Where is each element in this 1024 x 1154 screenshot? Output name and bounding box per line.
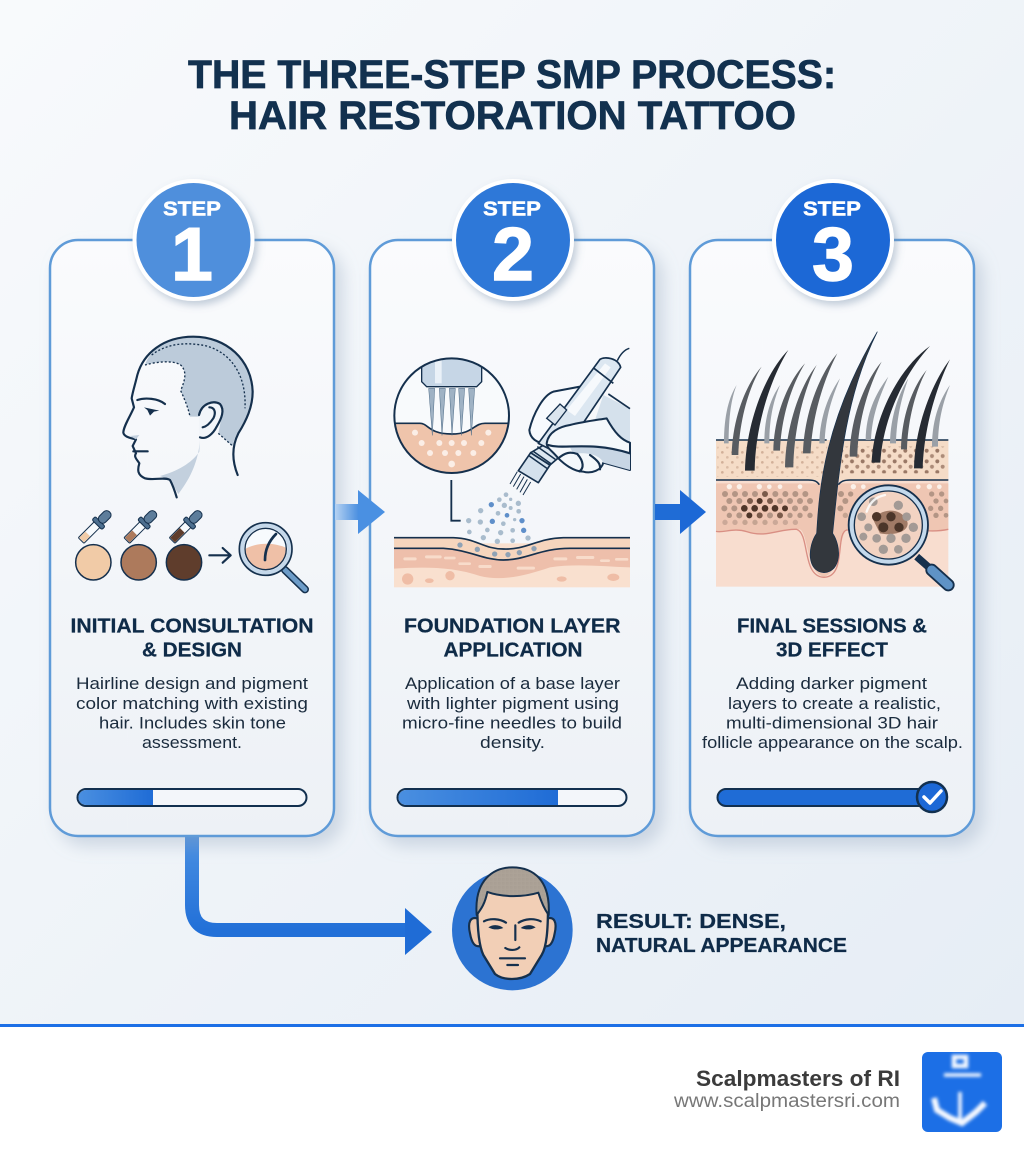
fine hairs xyxy=(724,377,950,447)
pen nose xyxy=(518,453,550,483)
step 1 description: Hairline design and pigment xyxy=(76,675,308,693)
card 1 outline xyxy=(50,240,334,836)
arrow: step 2 to step 3 xyxy=(655,490,706,534)
result: portrait xyxy=(452,867,573,997)
step 2 description: micro-fine needles to build xyxy=(402,714,622,732)
step 3 description xyxy=(702,675,963,752)
step 3 description: Adding darker pigment xyxy=(736,675,927,693)
step 3 heading: FINAL SESSIONS & xyxy=(737,616,927,638)
back of hand xyxy=(529,387,583,443)
step 2 badge xyxy=(454,181,572,299)
step 2 progress bar xyxy=(398,789,626,806)
swatch medium xyxy=(121,545,156,580)
swatch dark xyxy=(166,545,202,580)
step 1 description: color matching with existing xyxy=(76,695,308,713)
step 1 description xyxy=(76,675,308,752)
step 3 progress bar with check xyxy=(718,782,947,812)
step 1 heading: INITIAL CONSULTATION xyxy=(70,616,314,638)
dark hairs xyxy=(745,346,950,471)
icon: pigment spray xyxy=(466,492,531,544)
icon: SMP pen and hand xyxy=(510,348,630,495)
result: label: RESULT: DENSE, xyxy=(596,911,786,933)
step 3 heading xyxy=(737,616,927,662)
step 3 heading: 3D EFFECT xyxy=(776,640,888,662)
footer brand text: Scalpmasters of RI xyxy=(696,1066,900,1091)
step 3 badge xyxy=(774,181,892,299)
icon: magnifier over pigment xyxy=(849,485,948,585)
dropper light xyxy=(76,507,115,545)
pen body xyxy=(538,358,621,455)
gripping fingers xyxy=(547,418,630,472)
step 1 heading xyxy=(70,616,314,662)
step 2 description: Application of a base layer xyxy=(405,675,621,693)
icon: skin layers xyxy=(394,538,630,587)
footer brand text: www.scalpmastersri.com xyxy=(673,1091,900,1112)
dropper dark xyxy=(167,507,206,545)
connector arrow: step 1 to result xyxy=(192,836,432,955)
white row xyxy=(727,484,942,489)
swatch light xyxy=(76,545,111,580)
step 1 badge: STEP xyxy=(163,198,221,220)
footer band xyxy=(0,1024,1024,1154)
icon: scalp cross-section xyxy=(716,332,950,587)
step 3 description: layers to create a realistic, xyxy=(728,695,941,713)
footer brand text xyxy=(673,1066,900,1112)
card 2 outline xyxy=(370,240,654,836)
icon: needle magnified in skin xyxy=(393,357,510,521)
step 2 description: with lighter pigment using xyxy=(406,695,619,713)
step 3 badge: STEP xyxy=(803,198,861,220)
logo: anchor xyxy=(922,1052,1002,1132)
step 1 progress bar xyxy=(78,789,306,806)
title: HAIR RESTORATION TATTOO xyxy=(229,94,796,138)
title xyxy=(188,53,836,138)
step 1 description: assessment. xyxy=(142,734,242,752)
step 2 heading: APPLICATION xyxy=(444,640,582,662)
card 3 outline xyxy=(690,240,974,836)
thumb xyxy=(547,404,567,425)
panel: step 2 xyxy=(370,181,654,836)
step 2 description xyxy=(402,675,622,752)
step 1 badge xyxy=(134,181,252,299)
step 2 heading: FOUNDATION LAYER xyxy=(404,616,621,638)
result: label: NATURAL APPEARANCE xyxy=(596,935,847,957)
step 2 description: density. xyxy=(480,734,545,752)
arrow xyxy=(209,548,231,563)
step 2 badge: 2 xyxy=(492,212,534,296)
pigment dots xyxy=(721,491,948,525)
panel: step 1 xyxy=(50,181,334,836)
arrow: step 1 to step 2 xyxy=(335,490,385,534)
step 1 heading: & DESIGN xyxy=(142,640,242,662)
step 1 badge: 1 xyxy=(171,212,213,296)
medium hairs xyxy=(732,353,927,467)
step 2 badge: STEP xyxy=(483,198,541,220)
icon: magnifier on hair xyxy=(239,523,305,589)
result: label xyxy=(596,911,847,957)
skin lines xyxy=(716,438,948,442)
dropper medium xyxy=(122,507,160,545)
main follicle hair xyxy=(810,332,877,573)
step 2 heading xyxy=(404,616,621,662)
icon: head with hairline design xyxy=(123,337,253,497)
skin layers xyxy=(716,440,948,587)
title: THE THREE-STEP SMP PROCESS: xyxy=(188,53,836,97)
step 3 badge: 3 xyxy=(812,212,854,296)
step 3 description: follicle appearance on the scalp. xyxy=(702,734,963,752)
step 1 description: hair. Includes skin tone xyxy=(99,714,286,732)
panel: step 3 xyxy=(690,181,974,836)
icon: pigment droppers and swatches xyxy=(76,507,305,589)
step 3 description: multi-dimensional 3D hair xyxy=(726,714,939,732)
